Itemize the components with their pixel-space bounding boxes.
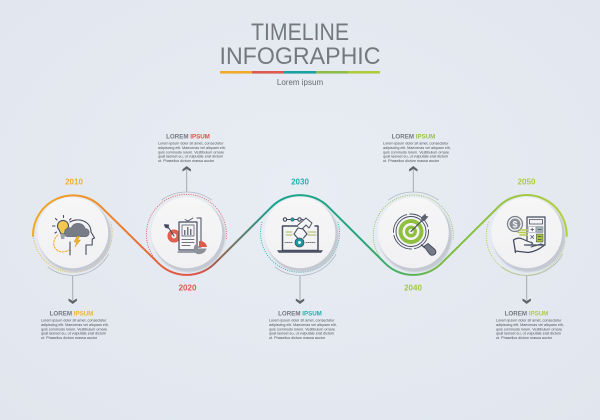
step 5 disc (486, 197, 565, 275)
step 3 disc (260, 197, 340, 275)
text block: step 5: LOREM IPSUM (505, 310, 548, 318)
text block: step 2: quat laoreet eu, ut vulputate erat dictum (158, 155, 223, 159)
text block: step 4: quis commodo lorem. Vestibulum ornare (383, 150, 449, 154)
title: TIMELINE (251, 19, 349, 46)
text block: step 5: adipiscing elit. Maecenas vel aliquam elit, (496, 323, 564, 327)
icon: hand with calculator and coin: $ (512, 219, 518, 229)
text block: step 2 (158, 134, 226, 163)
step 5 connector arrow (522, 276, 531, 304)
icon: target with arrow and magnifier (394, 214, 436, 255)
text block: step 3: adipiscing elit. Maecenas vel aliquam elit, (269, 323, 337, 327)
text block: step 3: quat laoreet eu, ut vulputate erat dictum (269, 332, 334, 336)
title (220, 19, 380, 70)
icon: laptop with robot arm (278, 218, 322, 252)
text block: step 1: ut. Phasellus dictum massa auctor (41, 336, 98, 340)
icon: head with lightbulb and cloud (52, 216, 94, 255)
text block: step 5: quis commodo lorem. Vestibulum ornare (496, 327, 562, 331)
text block: step 2: quis commodo lorem. Vestibulum ornare (158, 150, 224, 154)
icon: report with target and pie chart (164, 218, 207, 254)
text block: step 5: ut. Phasellus dictum massa auctor (496, 336, 553, 340)
text block: step 1: adipiscing elit. Maecenas vel aliquam elit, (41, 323, 109, 327)
text block: step 4: LOREM IPSUM (392, 134, 435, 140)
subtitle: Lorem ipsum (277, 78, 323, 87)
year 2050: 2050 (518, 178, 536, 186)
step 2 disc (146, 192, 226, 272)
timeline wave (33, 195, 567, 275)
title colour bar (220, 71, 380, 74)
text block: step 3: LOREM IPSUM (278, 310, 322, 318)
text block: step 3: quis commodo lorem. Vestibulum ornare (269, 327, 335, 331)
step 1 connector arrow (68, 276, 77, 304)
step 1 disc (33, 197, 112, 275)
year 2030: 2030 (291, 178, 309, 186)
year 2020: 2020 (179, 284, 197, 292)
text block: step 5: quat laoreet eu, ut vulputate erat dictum (496, 332, 561, 336)
text block: step 3: Lorem ipsum dolor sit amet, consectetur (269, 318, 335, 322)
text block: step 2: Lorem ipsum dolor sit amet, consectetur (158, 142, 224, 146)
step 4 disc (373, 192, 453, 272)
text block: step 2: LOREM IPSUM (166, 134, 210, 140)
year 2040: 2040 (404, 284, 422, 292)
text block: step 1: quis commodo lorem. Vestibulum ornare (41, 327, 107, 331)
text block: step 1 (41, 310, 109, 340)
text block: step 4: adipiscing elit. Maecenas vel aliquam elit, (383, 146, 451, 150)
text block: step 5: Lorem ipsum dolor sit amet, consectetur (496, 318, 562, 322)
text block: step 1: Lorem ipsum dolor sit amet, consectetur (41, 318, 107, 322)
text block: step 4: Lorem ipsum dolor sit amet, consectetur (383, 142, 449, 146)
text block: step 2: adipiscing elit. Maecenas vel aliquam elit, (158, 146, 226, 150)
text block: step 4: ut. Phasellus dictum massa auctor (383, 159, 440, 163)
title: INFOGRAPHIC (220, 43, 380, 70)
text block: step 5 (496, 310, 564, 340)
icon: hand with calculator and coin (508, 216, 545, 252)
text block: step 2: ut. Phasellus dictum massa auctor (158, 159, 215, 163)
text block: step 3: ut. Phasellus dictum massa auctor (269, 336, 326, 340)
step 4 connector arrow (409, 166, 418, 192)
text block: step 4: quat laoreet eu, ut vulputate erat dictum (383, 155, 448, 159)
text block: step 1: quat laoreet eu, ut vulputate erat dictum (41, 332, 106, 336)
text block: step 4 (383, 134, 451, 163)
step 2 connector arrow (182, 166, 191, 192)
year 2010: 2010 (65, 178, 83, 186)
step 3 connector arrow (296, 276, 304, 304)
text block: step 1: LOREM IPSUM (50, 310, 93, 318)
text block: step 3 (269, 310, 337, 340)
